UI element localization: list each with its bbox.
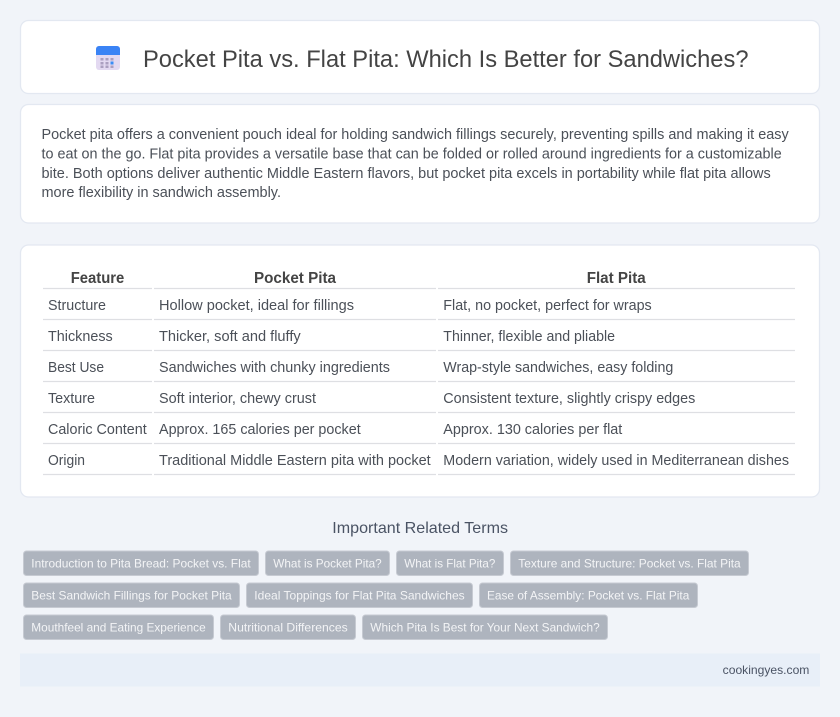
table row: caloric content bbox=[43, 422, 795, 444]
tag: Which Pita Is Best for Your Next Sandwich? bbox=[370, 620, 600, 634]
table row: texture bbox=[43, 391, 795, 412]
tag bbox=[220, 615, 356, 640]
tag: Texture and Structure: Pocket vs. Flat Pita bbox=[518, 556, 741, 570]
text block: introduction paragraph bbox=[42, 127, 789, 201]
panel: related term tags bbox=[24, 551, 748, 640]
table row: thickness: Thickness bbox=[48, 329, 113, 345]
table row: origin: Modern variation, widely used in Mediterranean dishes bbox=[443, 453, 789, 469]
table row: texture: Soft interior, chewy crust bbox=[159, 391, 316, 407]
panel: title header bbox=[20, 20, 820, 94]
table row: caloric content: Approx. 130 calories per flat bbox=[443, 422, 622, 438]
table header row: Feature bbox=[71, 270, 124, 287]
tag bbox=[362, 615, 608, 640]
table row: best use bbox=[43, 360, 795, 382]
icon: calendar bbox=[96, 46, 120, 70]
table header row bbox=[43, 270, 795, 288]
table row: structure: Structure bbox=[48, 298, 106, 314]
title: Pocket Pita vs. Flat Pita: Which Is Better for Sandwiches? bbox=[143, 46, 748, 73]
tag bbox=[266, 551, 390, 576]
heading: important related terms: Important Related Terms bbox=[332, 520, 508, 537]
tag: Ease of Assembly: Pocket vs. Flat Pita bbox=[487, 588, 690, 602]
table row: best use: Wrap-style sandwiches, easy folding bbox=[443, 360, 673, 376]
tag bbox=[480, 583, 698, 608]
table row: texture: Texture bbox=[48, 391, 95, 407]
text block: introduction paragraph: to eat on the go. Flat pita provides a versatile base that can be folded or rolled around ingredients for a customizable bbox=[42, 146, 782, 162]
table row: structure bbox=[43, 298, 795, 320]
table row: structure: Hollow pocket, ideal for fillings bbox=[159, 298, 354, 314]
table row: thickness bbox=[43, 329, 795, 350]
table row: best use: Sandwiches with chunky ingredients bbox=[159, 360, 390, 376]
table row: thickness: Thinner, flexible and pliable bbox=[443, 329, 615, 345]
tag bbox=[24, 583, 240, 608]
text block: introduction paragraph: bite. Both options deliver authentic Middle Eastern flavors, but pocket pita excels in portability while flat pita allows bbox=[42, 166, 771, 182]
tag bbox=[246, 583, 472, 608]
text block: introduction paragraph: Pocket pita offers a convenient pouch ideal for holding sandwich fillings securely, preventing spills and making it easy bbox=[42, 127, 789, 143]
tag: What is Flat Pita? bbox=[404, 556, 496, 570]
table row: origin: Origin bbox=[48, 453, 85, 469]
tag bbox=[510, 551, 748, 576]
tag bbox=[24, 615, 214, 640]
tag: Mouthfeel and Eating Experience bbox=[31, 620, 206, 634]
table header row: Pocket Pita bbox=[254, 270, 336, 287]
tag: Best Sandwich Fillings for Pocket Pita bbox=[31, 588, 232, 602]
table header row: Flat Pita bbox=[587, 270, 646, 287]
footer source text: cookingyes.com bbox=[723, 663, 809, 677]
tag: Introduction to Pita Bread: Pocket vs. Flat bbox=[31, 556, 251, 570]
footer band bbox=[20, 654, 820, 686]
table row: caloric content: Approx. 165 calories per pocket bbox=[159, 422, 361, 438]
panel: introduction bbox=[20, 104, 820, 223]
table row: structure: Flat, no pocket, perfect for wraps bbox=[443, 298, 652, 314]
tag bbox=[396, 551, 504, 576]
panel: comparison table bbox=[20, 245, 820, 497]
tag: Ideal Toppings for Flat Pita Sandwiches bbox=[254, 588, 465, 602]
tag bbox=[24, 551, 258, 576]
table row: origin bbox=[43, 453, 795, 474]
text block: introduction paragraph: more flexibility in sandwich assembly. bbox=[42, 185, 281, 201]
table row: thickness: Thicker, soft and fluffy bbox=[159, 329, 302, 345]
tag: Nutritional Differences bbox=[228, 620, 348, 634]
table row: texture: Consistent texture, slightly crispy edges bbox=[443, 391, 695, 407]
tag: What is Pocket Pita? bbox=[273, 556, 382, 570]
table row: origin: Traditional Middle Eastern pita with pocket bbox=[159, 453, 431, 469]
table row: best use: Best Use bbox=[48, 360, 104, 376]
table row: caloric content: Caloric Content bbox=[48, 422, 147, 438]
